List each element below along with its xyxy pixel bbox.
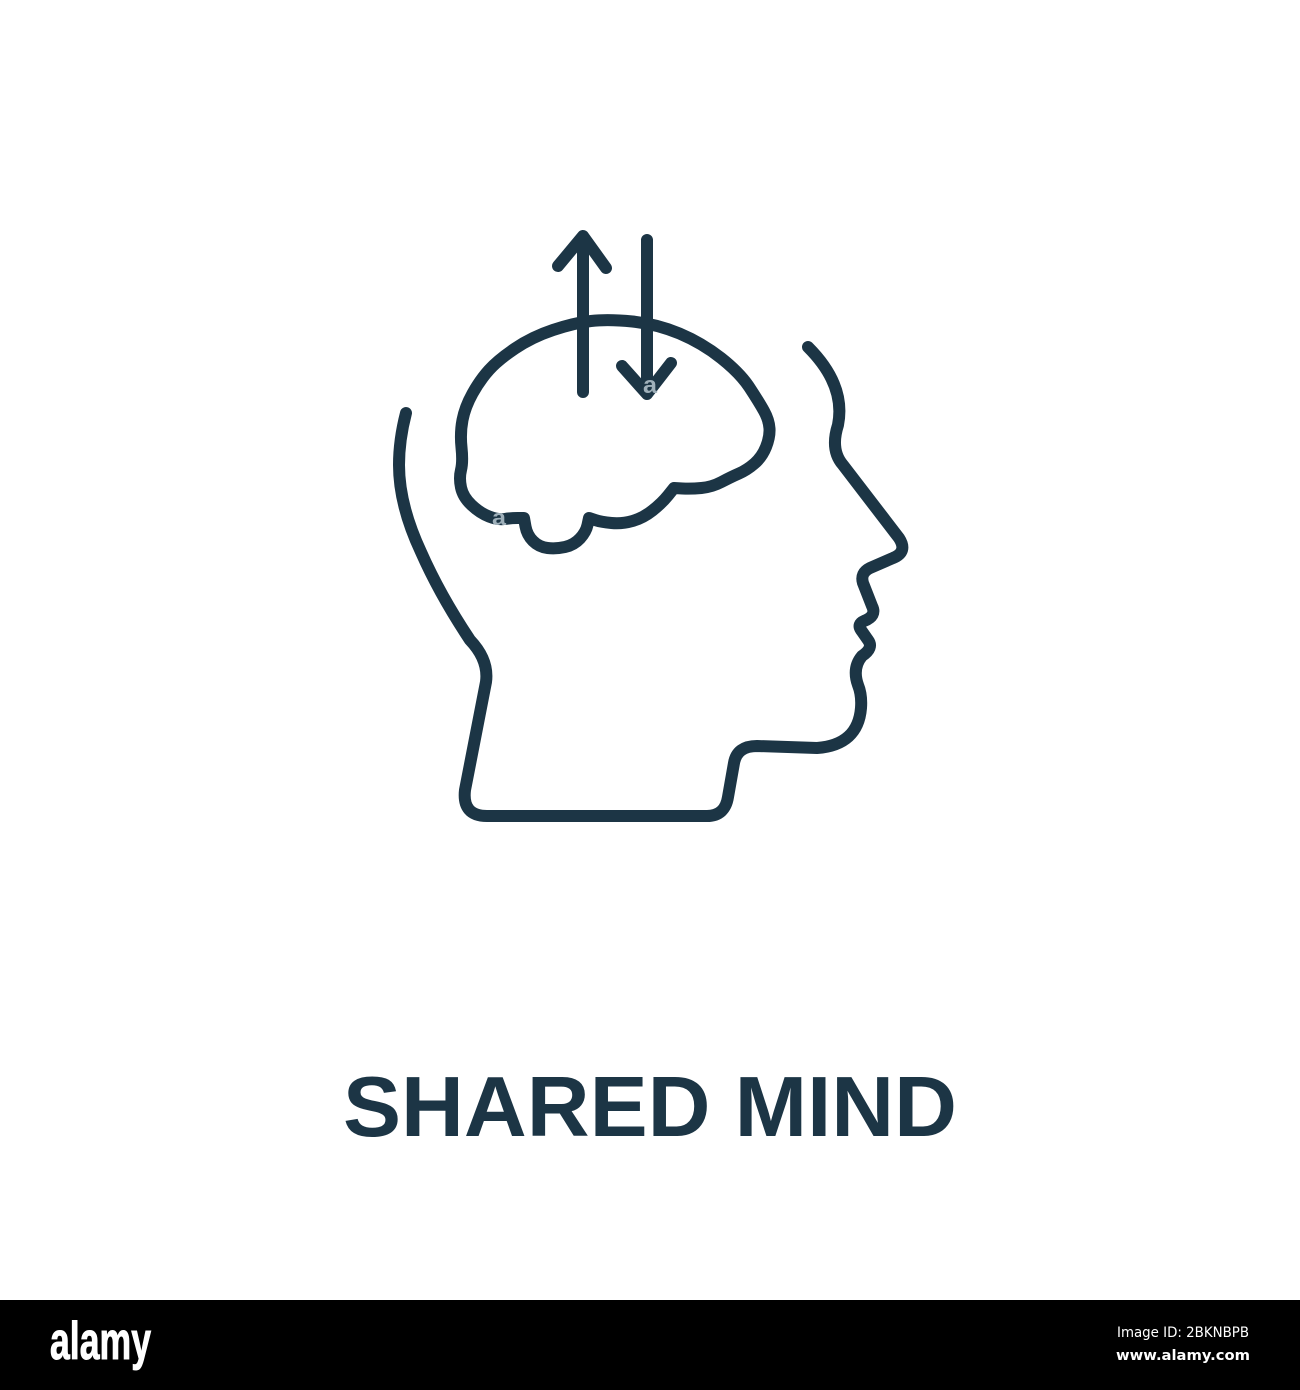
icon: brain outline bbox=[460, 320, 770, 548]
footer website: www.alamy.com bbox=[1116, 1348, 1250, 1364]
watermark: small letter on brain: a bbox=[492, 505, 507, 530]
icon: head with brain and arrows bbox=[399, 236, 902, 816]
footer logo: alamy bbox=[50, 1312, 151, 1371]
icon: head profile outline bbox=[399, 347, 902, 816]
watermark: small letter on arrow: a bbox=[643, 372, 658, 399]
arrow: up bbox=[558, 236, 606, 392]
title: SHARED MIND bbox=[343, 1060, 957, 1155]
footer image id: Image ID: 2BKNBPB bbox=[1117, 1325, 1249, 1341]
arrow: down bbox=[622, 240, 671, 394]
footer bar bbox=[0, 1300, 1300, 1390]
